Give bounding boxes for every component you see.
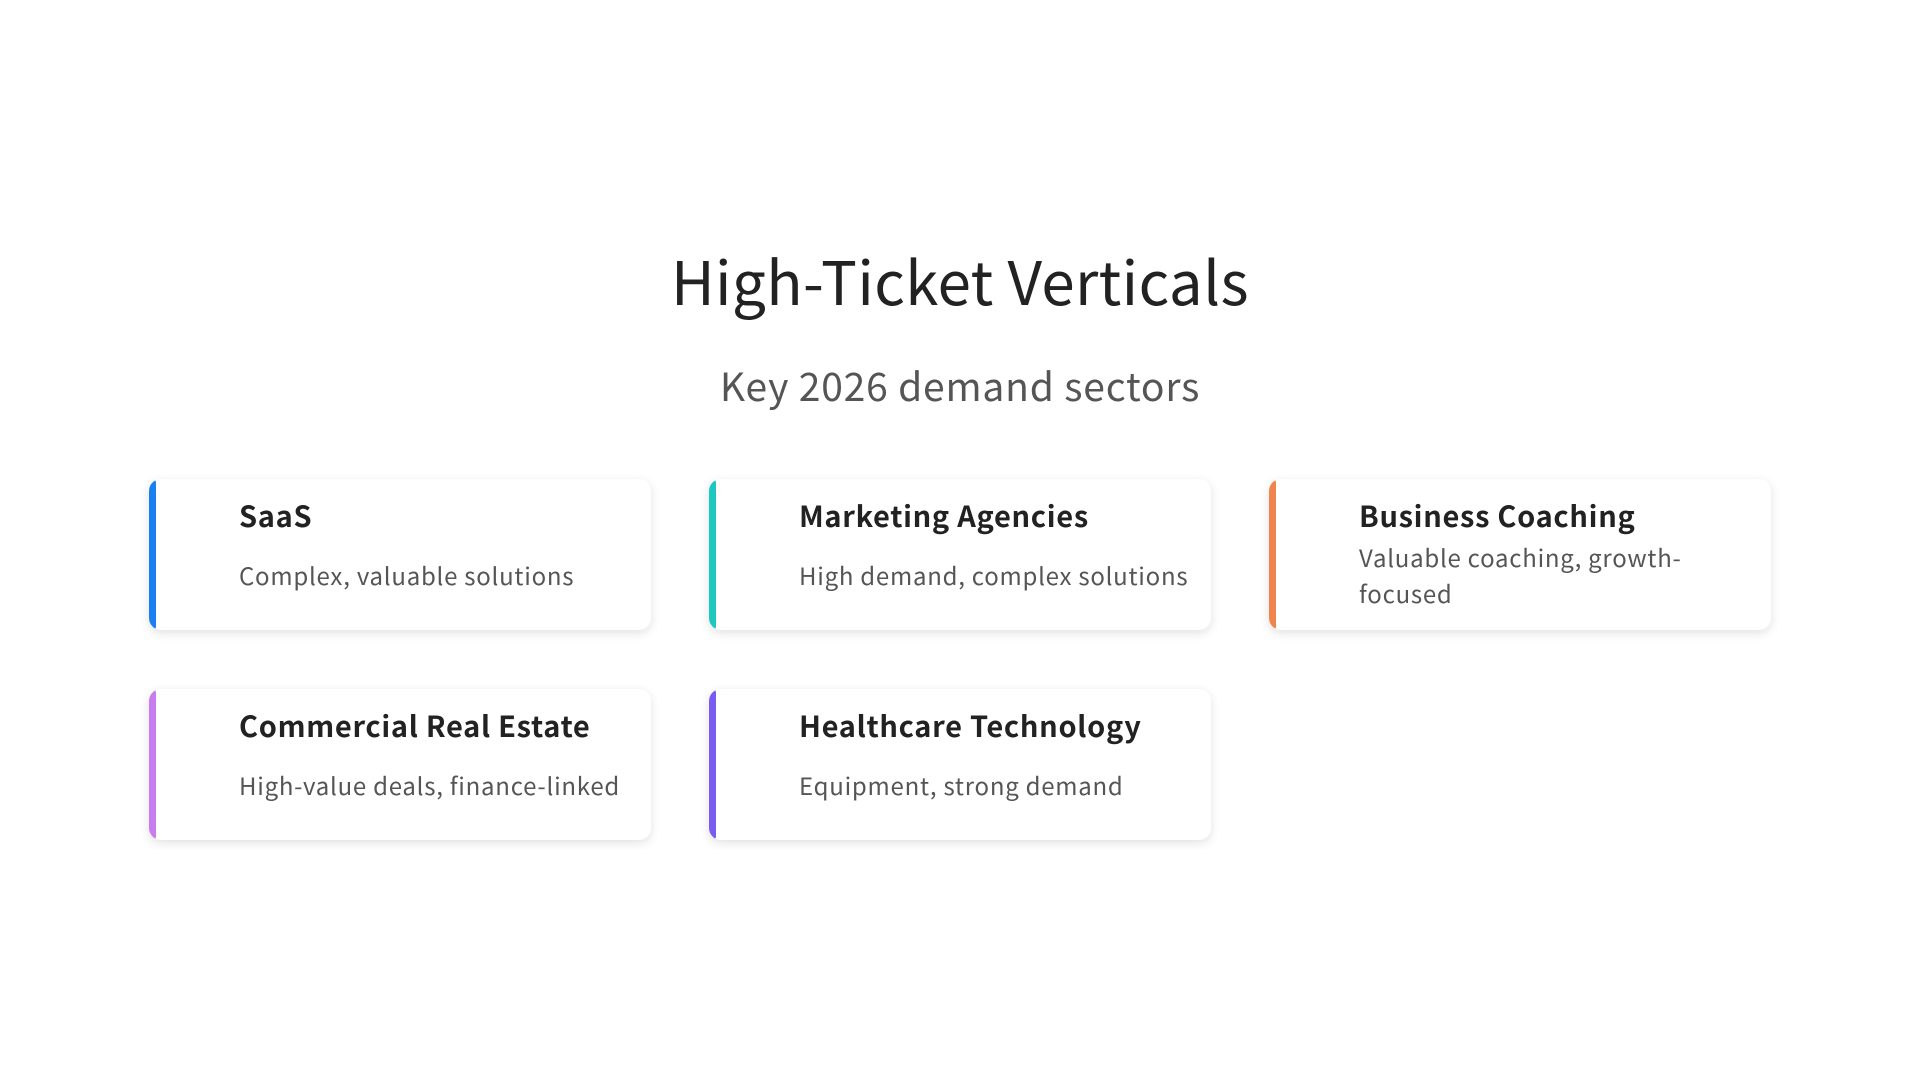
- card: Commercial Real Estate: [149, 689, 651, 840]
- card: Business Coaching: Valuable coaching, growth-focused: [1359, 539, 1682, 610]
- subtitle: Key 2026 demand sectors: [720, 357, 1200, 413]
- card: SaaS: [149, 479, 651, 630]
- card: Business Coaching: [1269, 479, 1771, 630]
- card: SaaS: Complex, valuable solutions: [239, 557, 574, 592]
- card: Healthcare Technology: Equipment, strong demand: [799, 767, 1124, 802]
- card: Commercial Real Estate: Commercial Real Estate: [239, 704, 590, 746]
- card: Healthcare Technology: [709, 689, 1211, 840]
- card: Commercial Real Estate: High-value deals, finance-linked: [239, 767, 620, 802]
- title: High-Ticket Verticals: [671, 236, 1249, 323]
- card: Healthcare Technology: Healthcare Technology: [799, 704, 1142, 746]
- card: Marketing Agencies: High demand, complex solutions: [799, 557, 1188, 592]
- card: Marketing Agencies: [709, 479, 1211, 630]
- card: SaaS: SaaS: [239, 494, 312, 536]
- card: Business Coaching: Business Coaching: [1359, 494, 1636, 536]
- card: Marketing Agencies: Marketing Agencies: [799, 494, 1089, 536]
